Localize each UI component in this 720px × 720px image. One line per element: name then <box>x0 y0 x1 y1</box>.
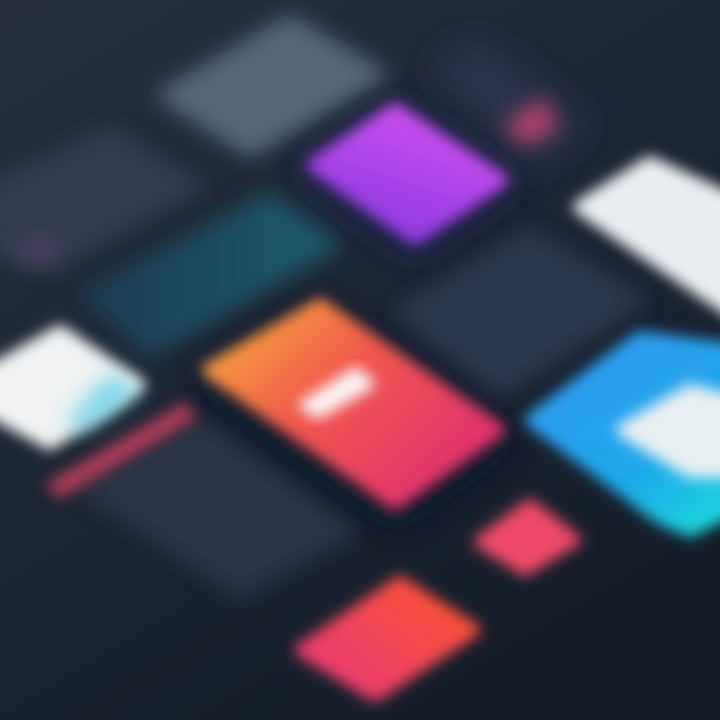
card: dark top right <box>430 40 590 170</box>
pill: white on orange card <box>304 372 370 414</box>
tile: small red <box>480 505 575 570</box>
card: red bottom <box>302 583 473 695</box>
accent: cyan on white card <box>65 375 140 430</box>
card: dark left <box>0 135 195 265</box>
panel: white on blue card <box>622 390 720 472</box>
card shadow: purple <box>295 100 520 258</box>
card: blue <box>532 338 720 530</box>
card: dark center right <box>402 235 638 390</box>
card: dark bottom left <box>88 425 348 590</box>
accent: small pink mark <box>505 97 558 145</box>
accent: faint purple mark <box>15 235 60 265</box>
card: orange red <box>209 305 498 503</box>
card: gray top <box>165 22 380 150</box>
card: white right <box>580 163 720 310</box>
card: white left <box>0 332 138 443</box>
bar: pink <box>48 403 194 497</box>
card: purple <box>314 110 501 238</box>
card: teal <box>90 200 332 350</box>
card shadow: orange <box>195 305 515 525</box>
